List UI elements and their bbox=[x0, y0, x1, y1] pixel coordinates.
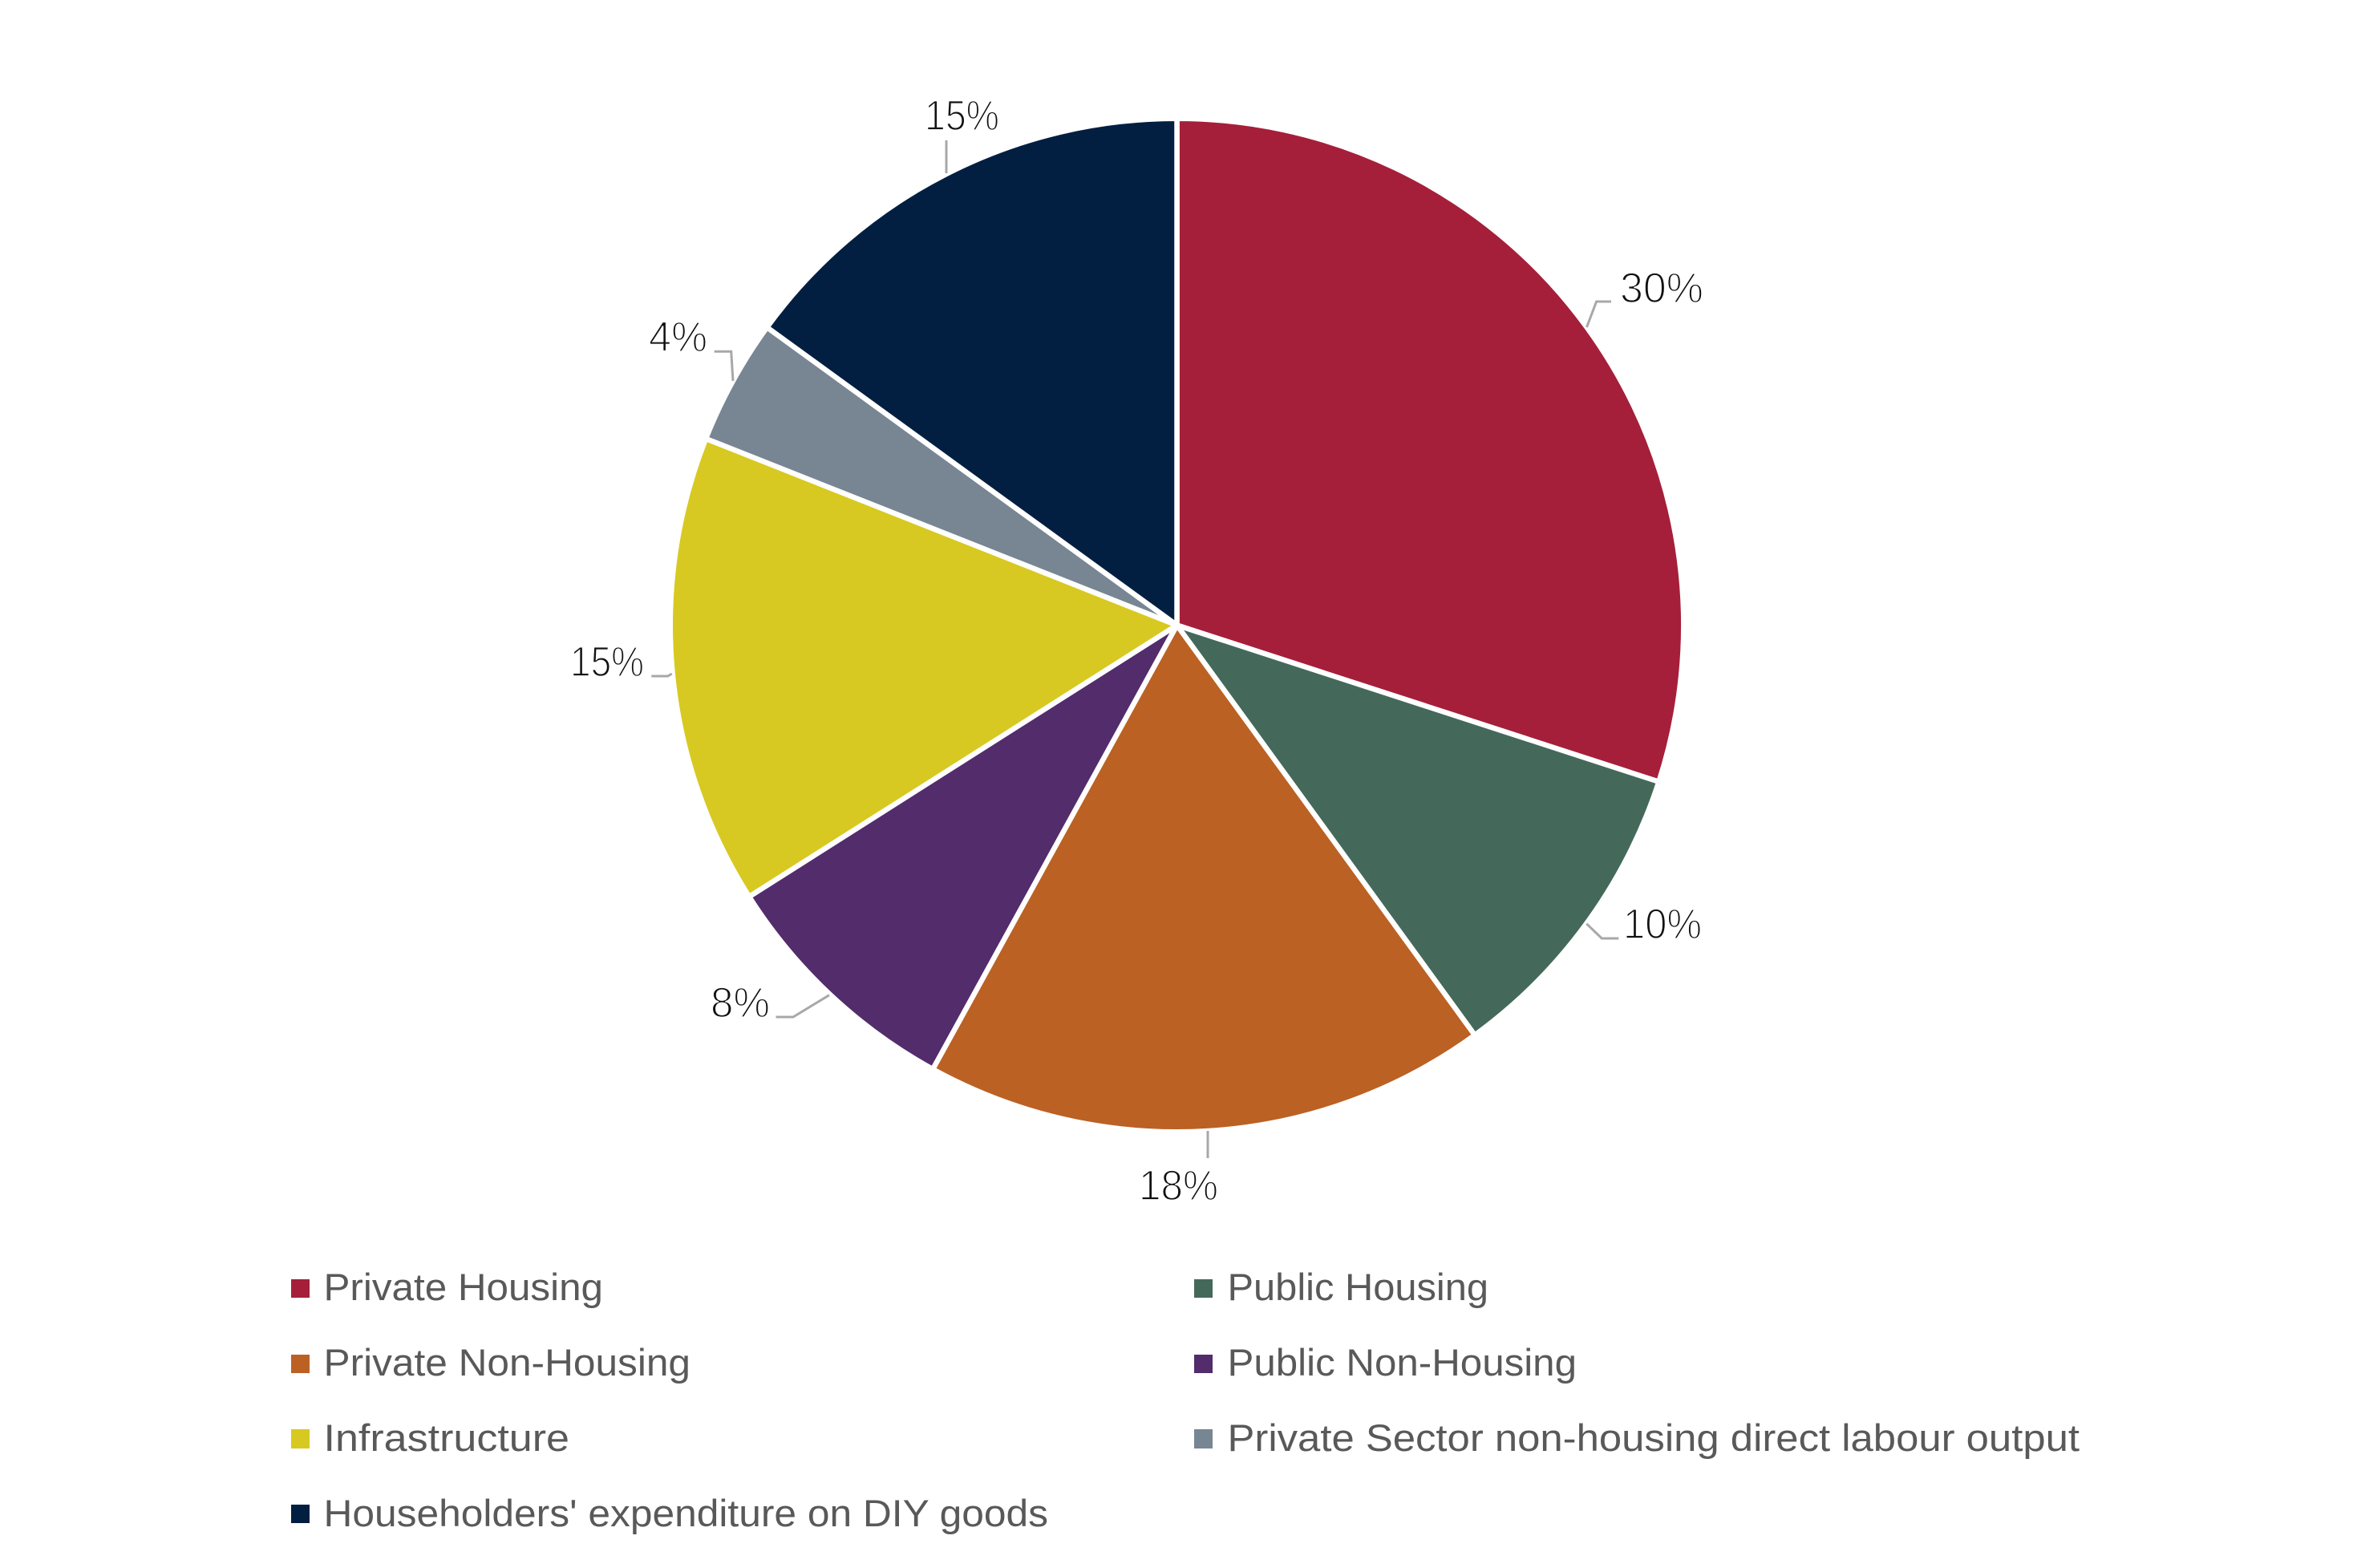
leader line: 18% bbox=[1206, 1131, 1209, 1158]
legend item: Infrastructure: Infrastructure bbox=[324, 1416, 569, 1459]
legend item: Householders' expenditure on DIY goods: Householders' expenditure on DIY goods bbox=[324, 1492, 1048, 1534]
slice: Private Sector non-housing direct labour output 4% bbox=[706, 327, 1177, 626]
label: 8%: 8% bbox=[711, 979, 770, 1027]
leader line: 15% DIY bbox=[945, 140, 948, 173]
legend item: Private Housing: Private Housing bbox=[324, 1266, 603, 1308]
pie chart bbox=[670, 119, 1683, 1132]
slice: Private Non-Housing 18% bbox=[933, 626, 1475, 1132]
legend bbox=[291, 1266, 2080, 1534]
leader line: 10% bbox=[1586, 924, 1618, 938]
leader line: 15% infrastructure bbox=[651, 674, 672, 676]
label: 15% DIY: 15% bbox=[925, 92, 999, 140]
label: 18%: 18% bbox=[1139, 1162, 1218, 1209]
label: 15% infrastructure: 15% bbox=[570, 638, 644, 686]
data labels bbox=[570, 92, 1703, 1209]
leader line: 30% bbox=[1586, 302, 1611, 327]
legend item: Public Non-Housing: Public Non-Housing bbox=[1227, 1341, 1577, 1384]
slice: Public Housing 10% bbox=[1177, 626, 1658, 1035]
legend item: Public Housing: Public Housing bbox=[1227, 1266, 1488, 1308]
slice: Public Non-Housing 8% bbox=[749, 626, 1177, 1069]
leader line: 8% bbox=[776, 995, 829, 1017]
legend item: Private Non-Housing: Private Non-Housing bbox=[324, 1341, 691, 1384]
slice: Infrastructure 15% bbox=[670, 439, 1177, 897]
leader line: 4% bbox=[715, 351, 733, 381]
slice: Private Housing 30% bbox=[1177, 119, 1683, 782]
legend item: Private Sector non-housing direct labour output: Private Sector non-housing direct labour output bbox=[1227, 1416, 2080, 1459]
label: 4%: 4% bbox=[649, 314, 707, 361]
label: 10%: 10% bbox=[1623, 901, 1702, 948]
label: 30%: 30% bbox=[1620, 265, 1703, 312]
slice: Householders' expenditure on DIY goods 15% bbox=[767, 119, 1177, 625]
